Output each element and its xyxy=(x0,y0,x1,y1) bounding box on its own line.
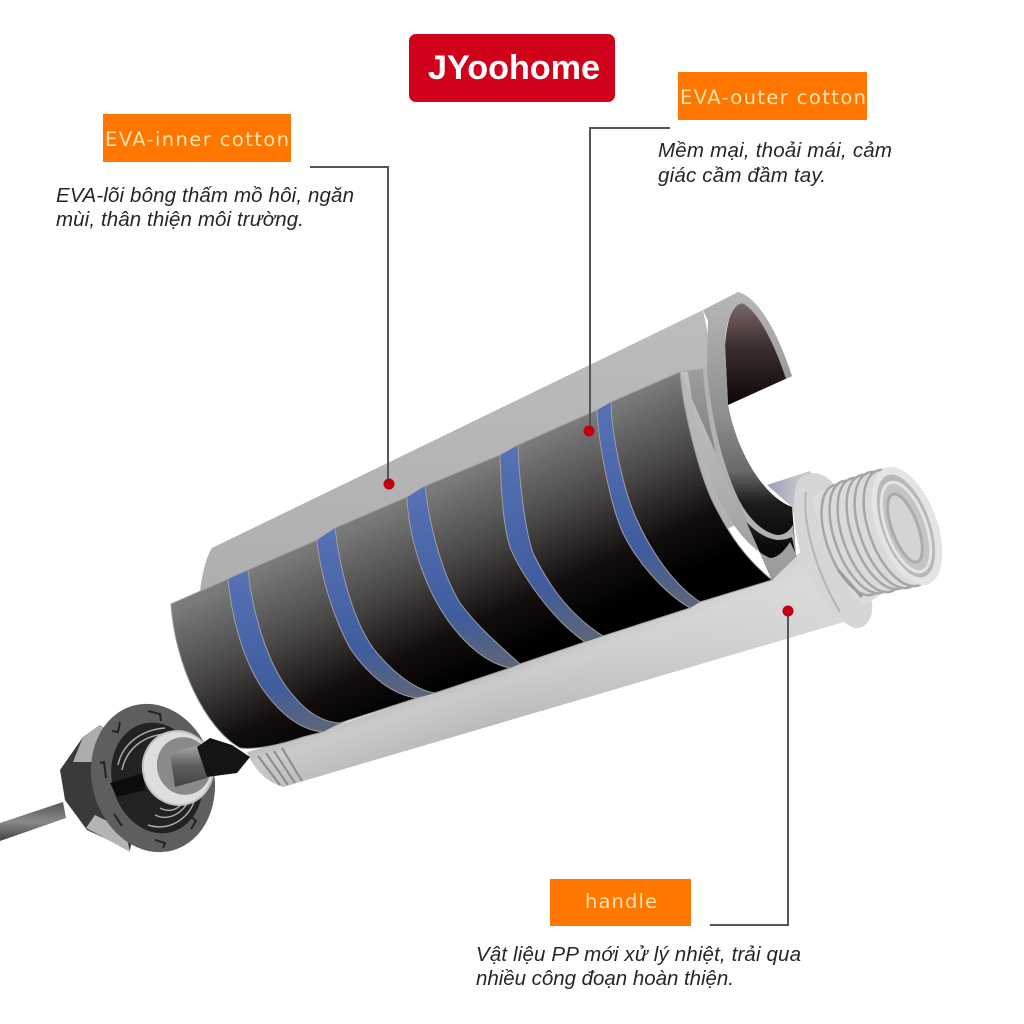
text: handle description xyxy=(476,943,801,990)
threaded end and collar xyxy=(794,457,956,628)
inner cotton tube xyxy=(198,303,792,745)
illustration: handle cutaway xyxy=(0,292,956,866)
leader line: handle xyxy=(710,606,794,925)
text: handle description: nhiều công đoạn hoàn thiện. xyxy=(476,967,734,990)
text: EVA outer description: giác cầm đầm tay. xyxy=(658,164,826,187)
label: EVA-inner cotton xyxy=(103,114,291,162)
label: handle xyxy=(550,879,691,926)
cap interior xyxy=(99,712,215,844)
text: EVA inner description: mùi, thân thiện môi trường. xyxy=(56,208,304,231)
brand logo xyxy=(409,34,615,102)
rope xyxy=(0,802,66,841)
brand logo: JYoohome xyxy=(428,49,600,87)
cap body xyxy=(60,725,150,850)
text: EVA outer description: Mềm mại, thoải mái, cảm xyxy=(658,139,892,162)
text: handle description: Vật liệu PP mới xử lý nhiệt, trải qua xyxy=(476,943,801,966)
black foam segments xyxy=(171,372,772,748)
silver washer xyxy=(135,723,221,813)
label: handle: handle xyxy=(585,890,657,913)
leader line: outer cotton xyxy=(584,128,670,436)
label: EVA-inner cotton: EVA-inner cotton xyxy=(105,128,289,151)
metal handle core xyxy=(247,471,857,787)
end cap with rope xyxy=(0,690,250,866)
text: EVA outer description xyxy=(658,139,892,187)
blue foam bands xyxy=(228,402,700,732)
layered rim at open end xyxy=(680,292,797,580)
label: EVA-outer cotton: EVA-outer cotton xyxy=(680,86,866,109)
text: EVA inner description: EVA-lõi bông thấm mồ hôi, ngăn xyxy=(56,184,354,207)
text: EVA inner description xyxy=(56,184,354,231)
leader line: inner cotton xyxy=(310,167,394,490)
shaft and tip xyxy=(170,745,207,787)
label: EVA-outer cotton xyxy=(678,72,867,120)
